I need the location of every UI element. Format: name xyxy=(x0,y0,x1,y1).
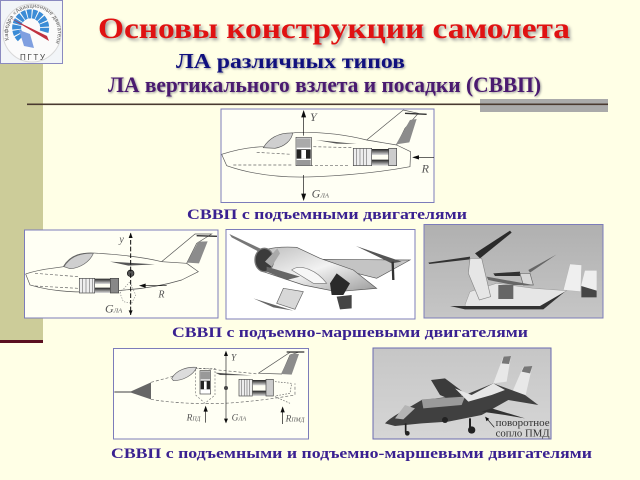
diagram 3: combined xyxy=(114,348,308,439)
cruise engine xyxy=(239,379,292,403)
caption: lift engines: СВВП с подъемными двигателями xyxy=(187,207,467,223)
weight vector xyxy=(302,175,306,200)
tail fin 1 xyxy=(563,264,582,292)
diagram 2: lift-cruise engines xyxy=(24,230,218,318)
dark shade xyxy=(330,273,350,295)
grey rule accent xyxy=(480,99,608,112)
photo: combined VTOL jet xyxy=(373,348,551,440)
canopy xyxy=(172,367,197,381)
photo: lift-engine jet xyxy=(226,230,415,319)
belly xyxy=(450,292,565,309)
side shading xyxy=(267,267,300,280)
lift vector xyxy=(302,111,306,136)
lift engine xyxy=(196,368,215,403)
tail xyxy=(281,354,299,375)
logo xyxy=(0,0,63,64)
photo label: поворотное xyxy=(496,418,550,429)
nozzle xyxy=(442,417,448,423)
canopy xyxy=(263,133,293,148)
body highlight xyxy=(292,267,327,283)
wing xyxy=(487,277,533,285)
lift vector R2 xyxy=(281,407,284,424)
logo: blue ring xyxy=(17,14,45,38)
arrow head xyxy=(129,233,133,315)
thrust vector xyxy=(140,284,167,287)
gear xyxy=(337,295,352,309)
title: Основы конструкции самолета xyxy=(98,12,570,45)
logo: lower fan xyxy=(19,30,34,48)
second tail fin xyxy=(512,366,532,395)
rotor blades xyxy=(428,257,470,264)
subtitle: ЛА различных типов xyxy=(176,49,405,73)
left stripe xyxy=(0,64,43,341)
photo: tiltrotor xyxy=(424,224,603,318)
label R: R xyxy=(157,289,164,300)
centre of mass xyxy=(224,386,228,390)
label Y: Y xyxy=(231,354,238,364)
left stripe base line xyxy=(0,340,43,343)
tail fin shadow xyxy=(581,286,597,297)
rear rotor blade tip xyxy=(528,254,557,273)
cruise engine xyxy=(353,148,397,166)
forward wing xyxy=(229,234,265,255)
wing xyxy=(110,262,155,266)
lower wing xyxy=(277,288,303,309)
label G: GЛА xyxy=(312,187,330,201)
label R cruise: RПМД xyxy=(285,415,306,425)
fuselage xyxy=(255,247,377,292)
nose wheel xyxy=(405,431,410,436)
label R: R xyxy=(421,161,430,175)
caption: lift-cruise engines: СВВП с подъемно-маршевыми двигателями xyxy=(172,325,528,341)
light wing band xyxy=(422,397,465,408)
header rule xyxy=(27,104,608,105)
nose gear xyxy=(403,423,408,433)
tail tips xyxy=(502,356,532,373)
photo label 2: сопло ПМД xyxy=(496,429,550,440)
wing xyxy=(215,373,252,375)
nacelle 1 xyxy=(468,258,491,300)
nose cone xyxy=(114,382,151,399)
lift vector R xyxy=(204,407,207,423)
lift engine xyxy=(296,137,311,166)
tail fin 2 xyxy=(581,271,597,297)
tail wing xyxy=(320,259,410,278)
tail fins xyxy=(493,356,511,383)
thrust vector xyxy=(413,156,434,159)
label Y: y xyxy=(118,235,124,246)
label G: GЛА xyxy=(105,302,123,316)
tail xyxy=(187,241,208,263)
rear rotor blades xyxy=(493,272,520,276)
label Y: Y xyxy=(310,110,318,124)
wing xyxy=(316,140,357,144)
engine xyxy=(79,278,136,303)
centre of mass xyxy=(127,270,134,277)
label G: GЛА xyxy=(232,414,246,424)
canopy xyxy=(64,253,93,269)
intake cone xyxy=(265,248,280,267)
upper blade xyxy=(475,231,512,258)
vertical axis xyxy=(129,233,132,315)
fuselage xyxy=(385,383,538,426)
logo: needle xyxy=(10,18,49,41)
canopy xyxy=(395,405,415,419)
tailplane xyxy=(482,408,525,418)
tail xyxy=(396,119,417,144)
diagram 1: lift engines xyxy=(221,109,434,202)
main wing xyxy=(431,378,465,400)
pointer xyxy=(486,417,494,427)
axis arrow heads xyxy=(224,351,228,423)
label R lift: RПД xyxy=(186,414,202,424)
vertical axis xyxy=(225,353,227,423)
caption: combined engines: СВВП с подъемными и подъемно-маршевыми двигателями xyxy=(111,446,592,462)
section heading: ЛА вертикального взлета и посадки (СВВП) xyxy=(108,72,541,97)
door xyxy=(498,285,513,299)
intake xyxy=(255,248,274,272)
main wheel xyxy=(468,426,475,434)
main gear xyxy=(467,418,473,428)
light camo xyxy=(455,383,505,402)
nacelle 2 xyxy=(520,273,533,285)
logo: label: ПГТУ xyxy=(20,53,46,62)
fuselage xyxy=(465,283,567,308)
